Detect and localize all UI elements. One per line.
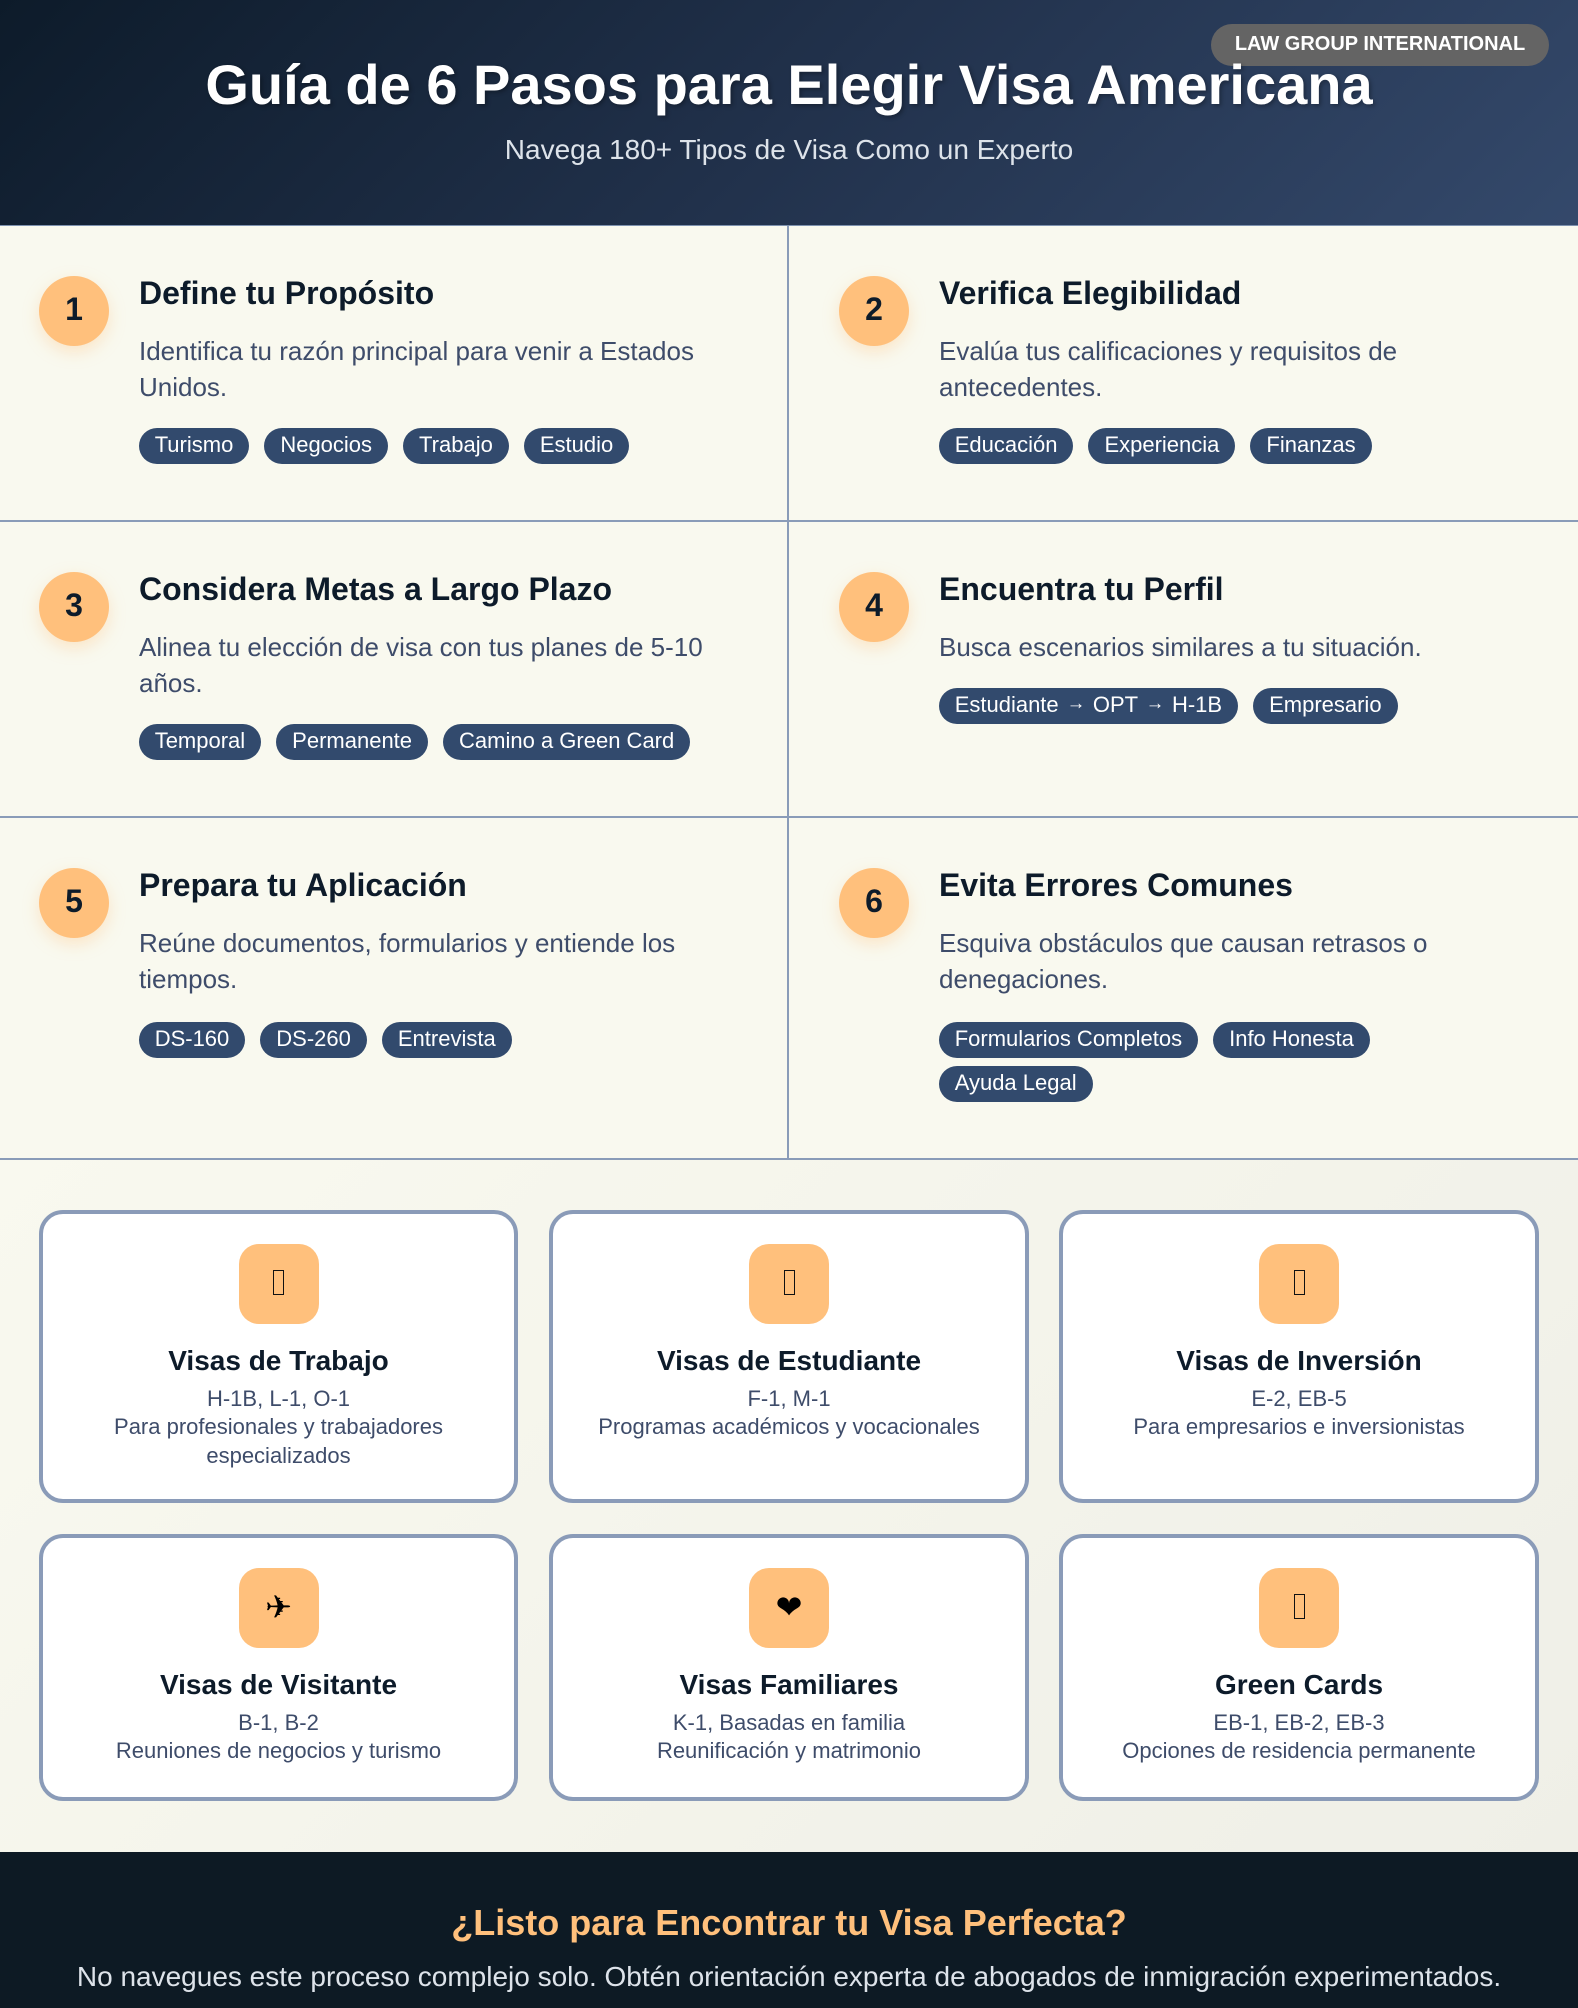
step 3 tags: Camino a Green Card	[459, 728, 674, 753]
step 4 tags: →	[1066, 692, 1085, 713]
visitor visas text: B-1, B-2	[238, 1710, 319, 1735]
footer text: No navegues este proceso complejo solo. Obtén orientación experta de abogados de inmigración experimentados.	[77, 1960, 1501, 1992]
step 3 tags	[139, 724, 690, 760]
header banner	[0, 0, 1578, 226]
step 1 number	[39, 276, 109, 346]
step 2 heading: Verifica Elegibilidad	[939, 275, 1241, 311]
step 5 number	[39, 868, 109, 938]
card: visitor visas	[38, 1534, 518, 1801]
icon: missing glyph box	[1259, 1244, 1339, 1324]
badge: law group: LAW GROUP INTERNATIONAL	[1235, 33, 1525, 55]
step 2 number: 2	[865, 291, 883, 327]
step 2 tags: Educación	[955, 432, 1057, 457]
step 2 tags: Finanzas	[1266, 432, 1356, 457]
icon: heart	[749, 1568, 829, 1648]
step 6 tags	[939, 1022, 1370, 1102]
card: student visas	[549, 1210, 1029, 1503]
card: family visas	[549, 1534, 1029, 1801]
step 6 number: 6	[865, 883, 883, 919]
investment visas heading: Visas de Inversión	[1176, 1345, 1422, 1376]
step 3 text: Alinea tu elección de visa con tus planes de 5-10 años.	[139, 632, 703, 698]
step 3 tags: Permanente	[292, 728, 412, 753]
investment visas text: Para empresarios e inversionistas	[1133, 1414, 1465, 1439]
step 5 tags: DS-160	[155, 1026, 229, 1051]
work visas text: H-1B, L-1, O-1	[207, 1386, 350, 1410]
step 4 text: Busca escenarios similares a tu situación.	[939, 632, 1422, 662]
step 6 number	[839, 868, 909, 938]
green cards text: EB-1, EB-2, EB-3	[1213, 1710, 1385, 1735]
step 5 text: Reúne documentos, formularios y entiende los tiempos.	[139, 928, 675, 994]
family visas text: K-1, Basadas en familia	[673, 1710, 905, 1735]
step 6 tags: Ayuda Legal	[955, 1070, 1077, 1095]
icon: missing glyph box	[749, 1244, 829, 1324]
work visas text	[114, 1386, 443, 1468]
panel: visa categories	[0, 1160, 1578, 1852]
step 1 heading: Define tu Propósito	[139, 275, 434, 311]
step 5 number: 5	[65, 883, 83, 919]
step 3	[33, 571, 703, 760]
icon: missing glyph box	[1259, 1568, 1339, 1648]
step 2	[833, 275, 1397, 464]
family visas text: Reunificación y matrimonio	[657, 1738, 921, 1763]
badge: law group	[1211, 24, 1549, 66]
card: investment visas	[1059, 1210, 1539, 1503]
step 4 tags	[939, 688, 1398, 724]
step 1 tags: Trabajo	[419, 432, 493, 457]
family visas text	[657, 1710, 921, 1763]
step 5 heading: Prepara tu Aplicación	[139, 867, 467, 903]
card: green cards	[1059, 1534, 1539, 1801]
step 5	[33, 867, 675, 1058]
green cards text: Opciones de residencia permanente	[1122, 1738, 1476, 1763]
visitor visas text: Reuniones de negocios y turismo	[116, 1738, 441, 1763]
step 4 number	[839, 572, 909, 642]
step 6	[833, 867, 1428, 1102]
icon: missing glyph box	[238, 1244, 318, 1324]
subtitle: Navega 180+ Tipos de Visa Como un Experto	[505, 134, 1073, 165]
visitor visas text	[116, 1710, 441, 1763]
step 4 tags: →	[1145, 692, 1164, 713]
step 3 number: 3	[65, 587, 83, 623]
step 6 text: Esquiva obstáculos que causan retrasos o denegaciones.	[939, 928, 1428, 994]
step 2 tags	[939, 428, 1372, 464]
step 5 tags: Entrevista	[398, 1026, 496, 1051]
investment visas text	[1133, 1386, 1465, 1439]
panel: six steps grid	[0, 226, 1578, 1160]
step 2 text: Evalúa tus calificaciones y requisitos de antecedentes.	[939, 336, 1397, 402]
step 2 number	[839, 276, 909, 346]
step 1 tags	[139, 428, 629, 464]
visitor visas heading: Visas de Visitante	[160, 1669, 397, 1700]
icon: heart: ❤	[776, 1589, 802, 1625]
step 1 text: Identifica tu razón principal para venir a Estados Unidos.	[139, 336, 694, 402]
step 6 heading: Evita Errores Comunes	[939, 867, 1293, 903]
footer heading: ¿Listo para Encontrar tu Visa Perfecta?	[451, 1902, 1127, 1942]
student visas text: Programas académicos y vocacionales	[598, 1414, 980, 1439]
work visas heading: Visas de Trabajo	[168, 1345, 389, 1376]
step 4 tags: Empresario	[1269, 692, 1382, 717]
step 1 number: 1	[65, 291, 83, 327]
step 1 tags: Estudio	[540, 432, 613, 457]
step 3 number	[39, 572, 109, 642]
footer call to action	[0, 1852, 1578, 2008]
student visas text: F-1, M-1	[747, 1386, 831, 1410]
student visas text	[598, 1386, 980, 1439]
step 6 tags: Info Honesta	[1229, 1026, 1354, 1051]
step 5 tags	[139, 1022, 512, 1058]
step 4 tags: Estudiante OPT H-1B	[955, 692, 1222, 717]
step 3 tags: Temporal	[155, 728, 245, 753]
step 3 heading: Considera Metas a Largo Plazo	[139, 571, 612, 607]
step 4 heading: Encuentra tu Perfil	[939, 571, 1224, 607]
card: work visas	[38, 1210, 518, 1503]
step 6 tags: Formularios Completos	[955, 1026, 1182, 1051]
family visas heading: Visas Familiares	[680, 1669, 898, 1700]
title: Guía de 6 Pasos para Elegir Visa Americana	[205, 53, 1373, 116]
icon: airplane: ✈	[265, 1589, 292, 1625]
step 1	[33, 275, 694, 464]
step 4	[833, 571, 1422, 724]
green cards heading: Green Cards	[1215, 1669, 1383, 1700]
step 5 tags: DS-260	[276, 1026, 351, 1051]
step 1 tags: Negocios	[280, 432, 372, 457]
investment visas text: E-2, EB-5	[1251, 1386, 1347, 1410]
green cards text	[1122, 1710, 1476, 1763]
step 2 tags: Experiencia	[1104, 432, 1219, 457]
step 4 number: 4	[865, 587, 883, 623]
step 1 tags: Turismo	[155, 432, 233, 457]
work visas text: Para profesionales y trabajadores especializados	[114, 1414, 443, 1468]
student visas heading: Visas de Estudiante	[657, 1345, 921, 1376]
icon: airplane	[238, 1568, 318, 1648]
